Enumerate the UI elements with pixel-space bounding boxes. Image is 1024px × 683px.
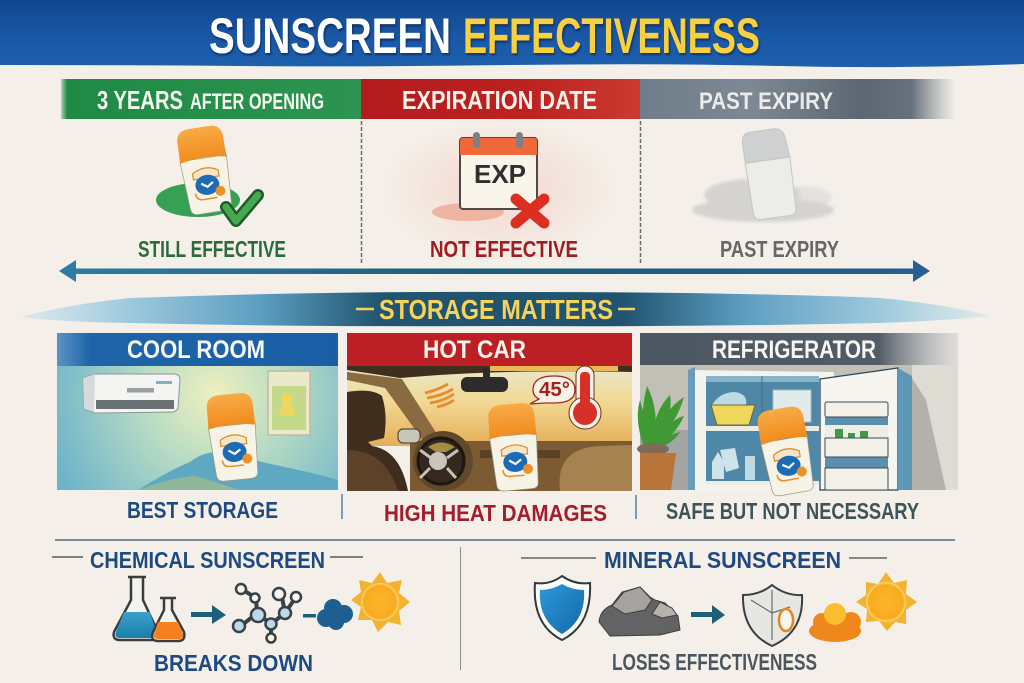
arrow: [191, 605, 226, 624]
icon: molecule: [233, 584, 301, 642]
header bar: grey: [640, 79, 956, 119]
icon: orange cloud: [809, 603, 861, 642]
link dash: [303, 614, 316, 618]
scene: roof: [347, 366, 632, 378]
icon: dark cloud: [317, 599, 353, 630]
icon: rocks: [599, 587, 680, 636]
icon: sunscreen bottle: [175, 124, 235, 216]
panel: hot car: [347, 333, 632, 526]
scene: seat: [347, 391, 408, 491]
header label: PAST EXPIRY: [699, 88, 833, 115]
caption: LOSES EFFECTIVENESS: [612, 649, 817, 675]
icon: blue shield: [535, 576, 590, 640]
heading: MINERAL SUNSCREEN: [604, 547, 841, 573]
panel title: HOT CAR: [423, 336, 526, 364]
panel: chemical sunscreen: [52, 547, 410, 676]
header label: EXPIRATION DATE: [402, 85, 597, 115]
icon: temperature bubble: [530, 376, 575, 404]
header label small: AFTER OPENING: [190, 89, 324, 114]
icon: bottle: [487, 402, 541, 492]
icon: sun: [351, 572, 410, 632]
icon: yellow bowl: [711, 405, 755, 425]
icon: blue flask: [114, 577, 158, 640]
scene: wall: [640, 365, 958, 490]
panel: mineral sunscreen: [521, 547, 917, 675]
section band: storage matters: [20, 292, 990, 326]
side mirror: [398, 429, 420, 443]
arrow: [691, 605, 725, 624]
panel title: REFRIGERATOR: [712, 336, 876, 364]
timeline panel: 3 years after opening: [61, 79, 361, 262]
header bar: red: [361, 79, 640, 119]
panel title: COOL ROOM: [127, 336, 265, 364]
caption: PAST EXPIRY: [720, 236, 839, 262]
icon: check mark: [226, 195, 258, 221]
timeline dividers: [362, 121, 640, 263]
icon: faded bottle: [741, 127, 798, 221]
icon: green pool under bottle: [156, 183, 240, 217]
header bar: green: [61, 79, 361, 119]
scene: windshield pillar: [347, 372, 442, 442]
header: [347, 333, 632, 366]
heading: CHEMICAL SUNSCREEN: [90, 547, 325, 573]
timeline arrow: [59, 260, 930, 282]
steering wheel: [413, 431, 473, 491]
timeline panel: expiration date: [361, 79, 640, 265]
title: EFFECTIVENESS: [463, 8, 760, 64]
icon: red cross: [516, 199, 544, 223]
icon: door: [820, 368, 898, 490]
caption: SAFE BUT NOT NECESSARY: [666, 498, 919, 524]
rear-view mirror: [461, 368, 508, 392]
red glow: [375, 115, 625, 265]
icon: framed picture: [268, 371, 310, 435]
icon: bottle: [755, 405, 817, 497]
icon: fridge body: [688, 367, 912, 490]
icon: air conditioner: [83, 374, 180, 413]
panel: cool room: [57, 333, 338, 523]
storage caption ticks: [342, 494, 636, 519]
calendar text: EXP: [474, 159, 526, 189]
icon: damaged shield: [743, 585, 802, 646]
title banner: [0, 0, 1024, 67]
icon: bottles: [712, 448, 739, 479]
scene: sky through windows: [347, 366, 632, 446]
calendar shadow: [432, 203, 504, 221]
caption: BEST STORAGE: [127, 497, 278, 523]
icon: bottle: [205, 392, 261, 482]
caption: STILL EFFECTIVE: [138, 236, 286, 262]
icon: thermometer: [569, 366, 601, 429]
header: [640, 333, 958, 365]
header label: 3 YEARS: [97, 85, 183, 115]
header: [57, 333, 338, 366]
scene: dashboard: [410, 441, 632, 491]
caption: NOT EFFECTIVE: [430, 236, 578, 262]
panel: refrigerator: [637, 333, 958, 524]
timeline panel: past expiry: [640, 79, 956, 262]
title: [209, 8, 760, 64]
temperature value: 45°: [539, 379, 570, 401]
caption: BREAKS DOWN: [154, 650, 313, 676]
caption: HIGH HEAT DAMAGES: [384, 500, 607, 526]
heading: STORAGE MATTERS: [379, 294, 613, 325]
icon: sun: [856, 572, 917, 631]
smudge: [692, 179, 834, 222]
icon: calendar: [460, 132, 537, 209]
scene: roof light: [490, 366, 618, 371]
icon: orange flask: [152, 598, 184, 641]
icon: kettle: [712, 392, 746, 405]
heat waves: [425, 384, 454, 407]
icon: plant: [637, 386, 684, 490]
section rule: [55, 539, 955, 541]
title: SUNSCREEN: [209, 8, 451, 64]
scene: [57, 366, 338, 490]
vertical divider: [460, 547, 462, 670]
icon: box: [773, 390, 811, 422]
